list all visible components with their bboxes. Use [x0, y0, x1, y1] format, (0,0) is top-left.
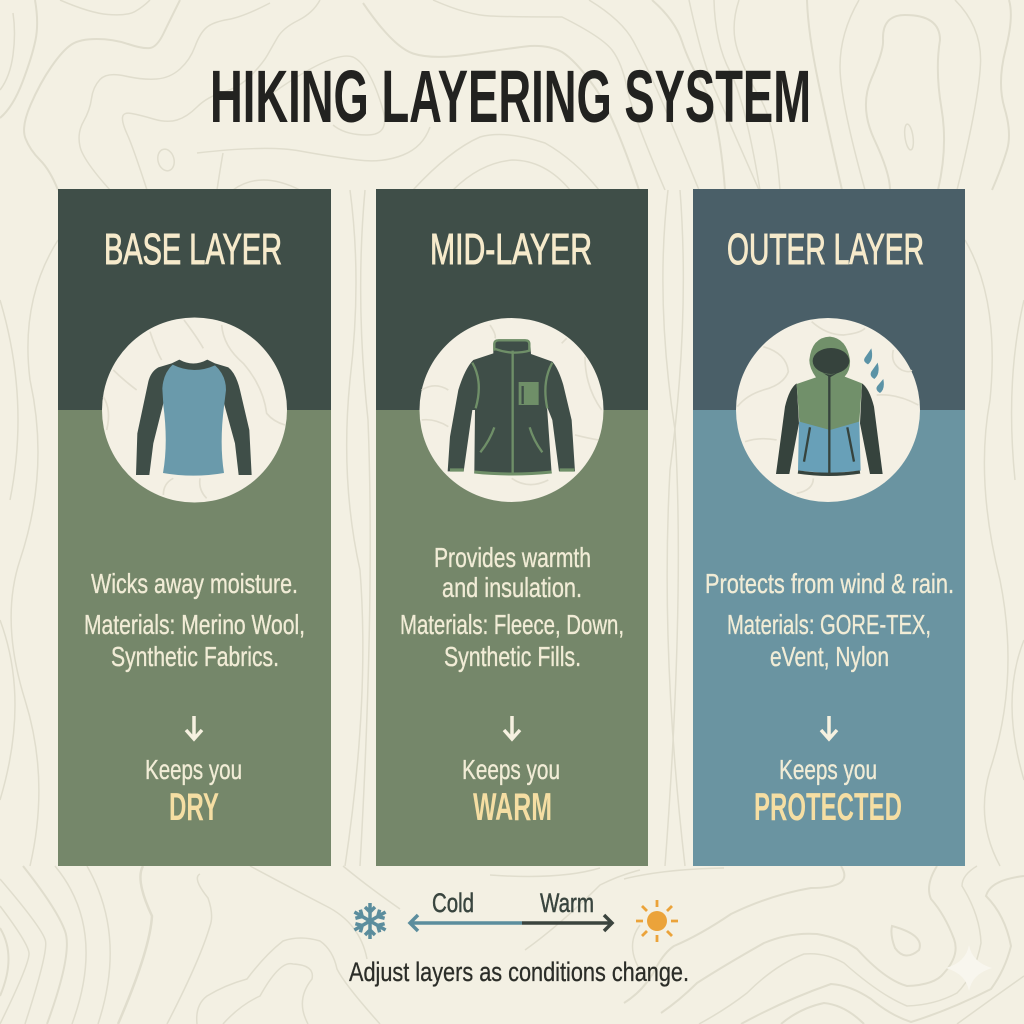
mid result: WARM	[473, 786, 552, 829]
panel: outer layer	[693, 189, 965, 866]
warm label: Warm	[540, 888, 594, 918]
caption: Adjust layers as conditions change.	[349, 957, 689, 987]
mid panel background	[376, 189, 648, 866]
mid description: Synthetic Fills.	[444, 641, 581, 672]
mid description: and insulation.	[442, 572, 582, 603]
mid keeps you: Keeps you	[462, 754, 560, 785]
base description	[84, 568, 305, 672]
arrow: mid down	[504, 716, 520, 739]
icon: rain drops	[864, 348, 884, 393]
base panel background	[58, 189, 331, 866]
cold label: Cold	[432, 888, 474, 918]
temperature legend	[352, 888, 678, 942]
mid heading: MID-LAYER	[430, 225, 592, 274]
arrow: cold to warm	[410, 915, 612, 931]
base keeps you: Keeps you	[145, 754, 242, 785]
base description: Materials: Merino Wool,	[84, 609, 305, 640]
base description: Synthetic Fabrics.	[111, 641, 279, 672]
outer panel background	[693, 189, 965, 866]
outer description: Materials: GORE-TEX,	[727, 609, 931, 640]
base icon circle	[102, 318, 287, 502]
arrow: base down	[186, 716, 202, 739]
outer description: eVent, Nylon	[770, 641, 889, 672]
icon: snowflake	[352, 903, 388, 939]
outer keeps you: Keeps you	[779, 754, 877, 785]
mid description: Provides warmth	[434, 542, 591, 573]
base result: DRY	[169, 786, 219, 829]
outer description	[705, 568, 954, 672]
icon: rain jacket	[776, 337, 883, 474]
outer icon circle	[736, 318, 920, 502]
icon: fleece jacket	[448, 339, 575, 474]
icon: sun	[636, 900, 678, 942]
outer description: Protects from wind & rain.	[705, 568, 954, 599]
panel: mid-layer	[376, 189, 648, 866]
outer result: PROTECTED	[754, 786, 902, 829]
base description: Wicks away moisture.	[91, 568, 298, 599]
mid icon circle	[420, 318, 604, 502]
base heading: BASE LAYER	[104, 225, 282, 274]
arrow: outer down	[821, 716, 837, 739]
panel: base layer	[58, 189, 331, 866]
mid description: Materials: Fleece, Down,	[400, 609, 624, 640]
mid description	[400, 542, 624, 672]
icon: base layer shirt	[136, 360, 252, 476]
